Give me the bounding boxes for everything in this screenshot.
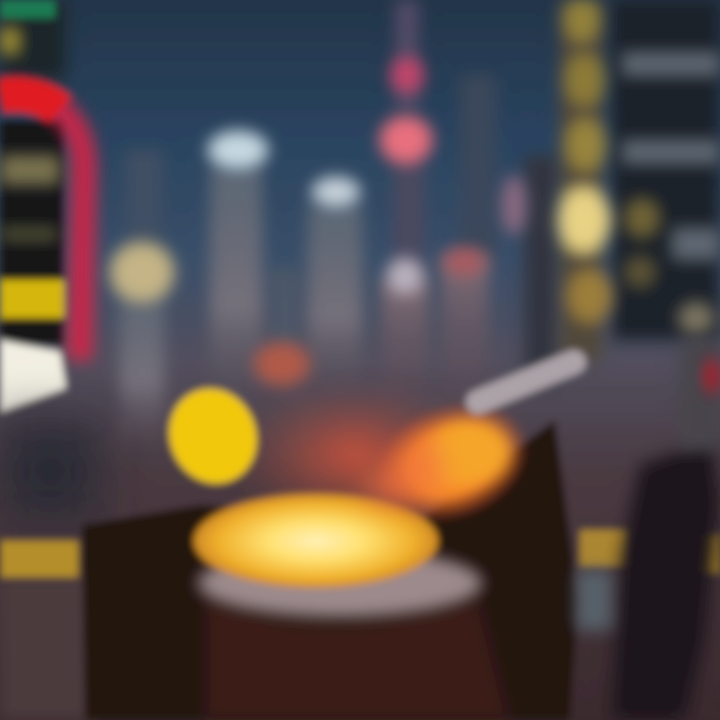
skyline towers [120, 0, 558, 450]
column of yellow lights [558, 0, 714, 360]
white sign base [0, 340, 66, 412]
red neon arc [0, 92, 84, 360]
glowing bowl surface [194, 494, 438, 588]
sign panel [0, 120, 64, 345]
yellow sign stripes [0, 155, 60, 185]
red haze above bowl [230, 380, 480, 530]
right dark figure [576, 340, 720, 720]
road and yellow stripes [0, 530, 720, 720]
white bowl rim [198, 549, 482, 617]
left neon sign [0, 0, 84, 412]
dark bowl body [82, 420, 578, 720]
white spoon streak [478, 362, 574, 402]
tower lights [110, 57, 526, 386]
orange flame [355, 380, 547, 544]
dark ground band left [0, 420, 100, 520]
right dark building [612, 0, 720, 340]
yellow coin [155, 375, 271, 497]
